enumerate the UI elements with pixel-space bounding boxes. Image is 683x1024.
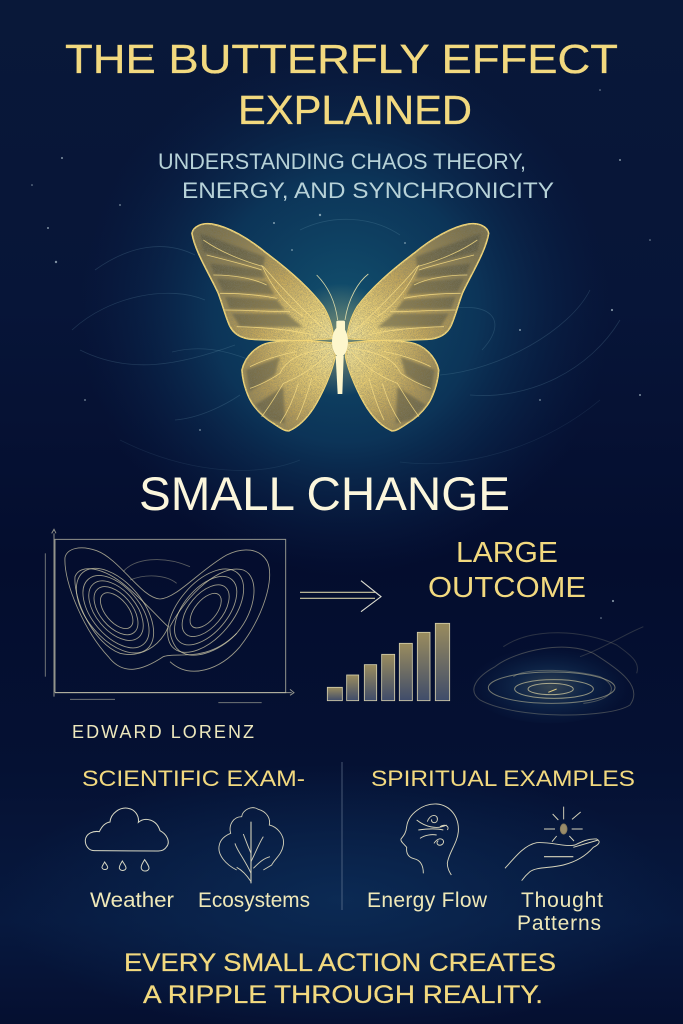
wing veins bbox=[203, 240, 477, 423]
subtitle: ENERGY, AND SYNCHRONICITY bbox=[182, 178, 554, 203]
heading: large outcome bbox=[428, 537, 586, 604]
caption: Edward Lorenz: EDWARD LORENZ bbox=[72, 722, 254, 742]
heading: large outcome: OUTCOME bbox=[428, 572, 586, 604]
body bbox=[332, 321, 348, 394]
left wings bbox=[192, 224, 335, 431]
panel: spiritual examples bbox=[367, 766, 635, 935]
label: weather: Weather bbox=[90, 889, 174, 912]
icon: head with swirls bbox=[401, 804, 458, 875]
butterfly illustration bbox=[192, 224, 489, 431]
heading: small change: SMALL CHANGE bbox=[139, 467, 510, 520]
Lorenz attractor chart bbox=[45, 529, 294, 703]
icon: hand with seed bbox=[505, 807, 599, 881]
arrow bbox=[300, 581, 381, 612]
panel: scientific examples bbox=[82, 766, 310, 912]
closing statement: A RIPPLE THROUGH REALITY. bbox=[143, 981, 543, 1009]
bar chart bbox=[327, 623, 450, 701]
heading: spiritual: SPIRITUAL EXAMPLES bbox=[371, 766, 635, 791]
antennae bbox=[317, 274, 368, 320]
heading: scientific: SCIENTIFIC EXAM- bbox=[82, 766, 305, 791]
label: thought patterns: Patterns bbox=[517, 912, 601, 935]
ripple illustration bbox=[468, 627, 643, 723]
wing dark cells bbox=[200, 233, 481, 423]
stars bbox=[31, 54, 651, 619]
attractor curve bbox=[61, 548, 270, 671]
closing statement bbox=[124, 949, 556, 1009]
chart frame bbox=[45, 529, 294, 703]
background swirls and stars bbox=[72, 219, 620, 470]
title: THE BUTTERFLY EFFECT bbox=[65, 36, 618, 82]
subtitle: UNDERSTANDING CHAOS THEORY, bbox=[158, 149, 526, 174]
subtitle bbox=[158, 149, 554, 203]
column divider bbox=[341, 762, 343, 910]
wing speckle bbox=[192, 224, 489, 431]
icon: cloud with rain bbox=[85, 808, 168, 871]
right wings bbox=[346, 224, 489, 431]
title: EXPLAINED bbox=[238, 87, 472, 133]
label: ecosystems: Ecosystems bbox=[198, 889, 310, 912]
label: thought patterns bbox=[517, 889, 603, 935]
icon: tree bbox=[219, 808, 284, 883]
label: thought patterns: Thought bbox=[521, 889, 603, 912]
title bbox=[65, 36, 618, 133]
heading: large outcome: LARGE bbox=[456, 537, 558, 569]
label: energy flow: Energy Flow bbox=[367, 889, 488, 912]
closing statement: EVERY SMALL ACTION CREATES bbox=[124, 949, 556, 977]
